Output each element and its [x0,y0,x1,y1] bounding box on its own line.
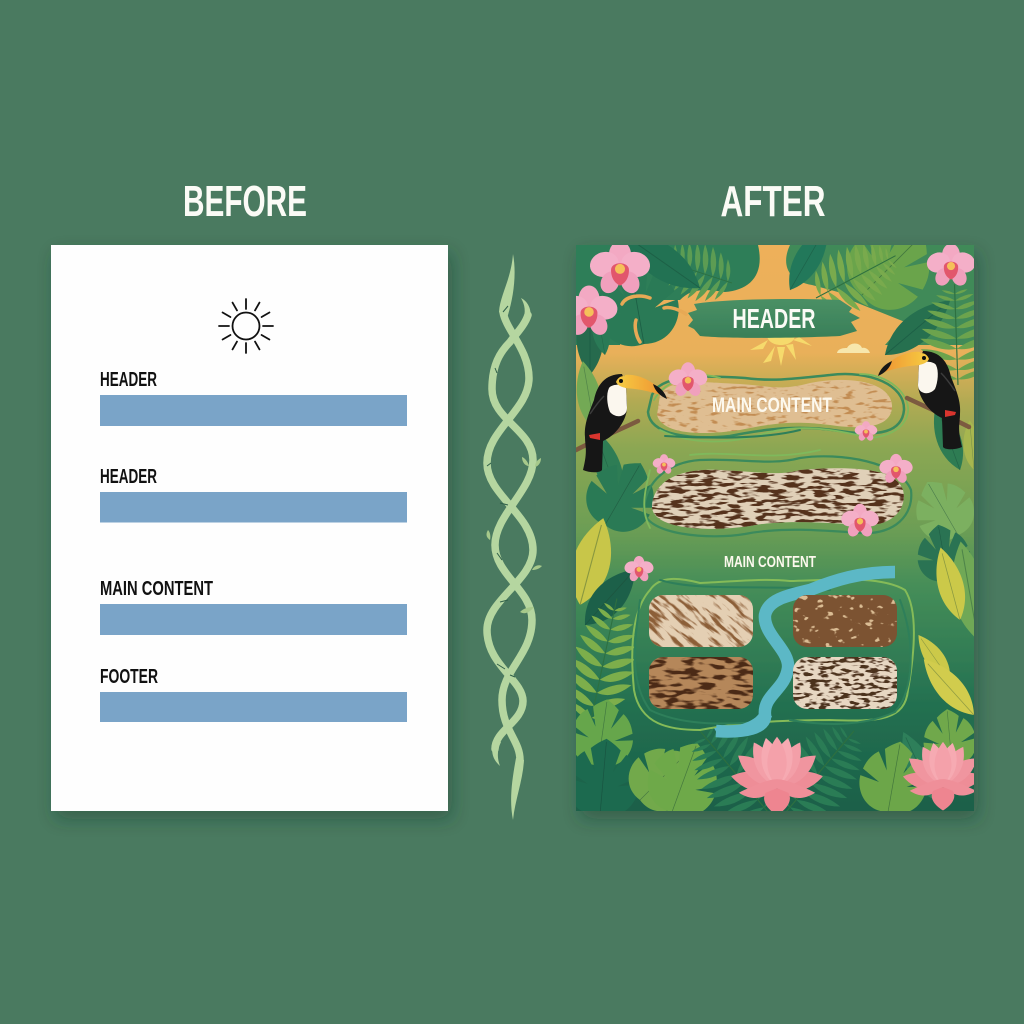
vine frame [648,374,908,442]
title: main content: MAIN CONTENT [712,394,832,417]
icon: sun outline [219,299,273,353]
flower: lotus right [903,742,974,810]
label: main content: MAIN CONTENT [100,578,213,600]
river [714,568,895,736]
heading: after: AFTER [720,177,826,226]
toucan: left [576,374,667,472]
section: main content two [644,450,914,538]
swatch: top left [649,595,753,647]
swatch: top right [793,595,897,647]
foliage: left side [576,361,654,765]
texture: sand hide [657,380,892,433]
section: main content one [648,362,908,442]
vine frame: outer [632,579,914,730]
vine frame [644,450,911,536]
banner: header: HEADER [732,303,816,334]
toucan: right [878,351,969,449]
orchid: floating [624,556,654,582]
orchid: top right [926,245,974,286]
heading: before: BEFORE [183,177,307,226]
flower: lotus center [729,736,825,815]
title: main content small: MAIN CONTENT [724,554,816,571]
foliage: canopy [576,245,974,385]
panel: before wireframe [51,245,448,811]
bar: header [100,395,407,426]
foliage: right side [916,414,974,760]
icon: cloud [837,344,870,353]
section: four hide swatches [631,566,915,738]
bar: footer [100,692,407,722]
orchid: right [879,454,913,483]
panel: after jungle poster [574,245,984,824]
swatch: bottom right [793,657,897,709]
label: header second: HEADER [100,466,157,488]
texture: tiger hide [652,468,904,529]
label: footer: FOOTER [100,666,158,688]
icon: sun [750,336,812,366]
bar: main content [100,604,407,635]
orchid: top left [590,245,650,294]
swatch: bottom left [649,657,753,709]
orchid: section one [668,362,708,396]
banner: header [688,299,860,338]
orchid: small top left [652,454,676,474]
orchid: bottom [841,504,879,536]
orchid: left [576,286,618,335]
bar: header second [100,492,407,522]
orchid: small [854,421,878,441]
foliage: bottom [576,727,932,811]
divider: twisted vines [487,254,542,820]
label: header: HEADER [100,369,157,391]
